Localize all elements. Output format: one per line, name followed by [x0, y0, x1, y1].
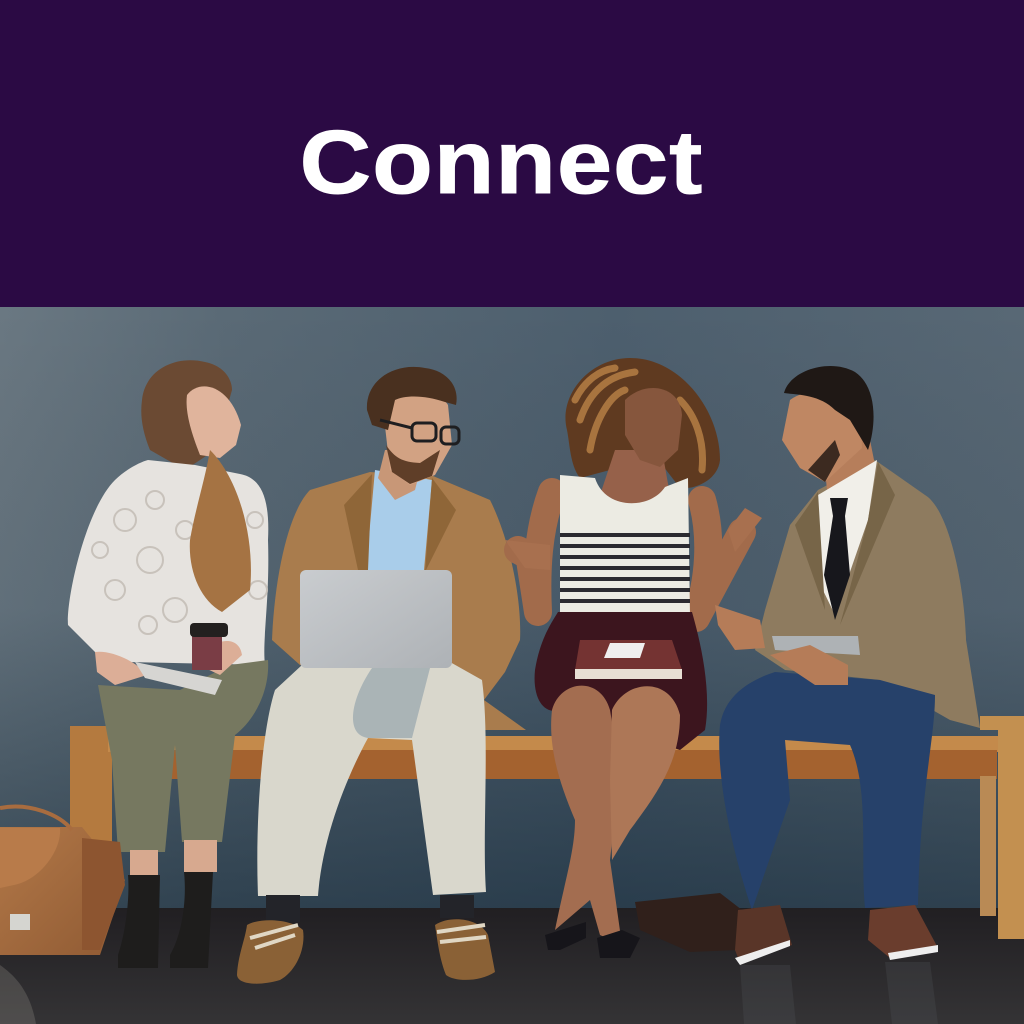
hands — [505, 508, 762, 570]
floor bag — [635, 893, 742, 952]
hair — [367, 367, 457, 430]
hands — [95, 641, 242, 685]
notebook — [575, 640, 682, 679]
skirt — [535, 612, 707, 750]
laptop — [300, 570, 452, 668]
bench — [70, 716, 1024, 939]
floor — [0, 908, 1024, 1024]
jacket — [755, 460, 980, 728]
head — [782, 391, 862, 482]
trousers — [257, 662, 486, 896]
coffee cup — [190, 623, 228, 670]
lace blouse — [68, 460, 268, 665]
neck — [822, 430, 875, 500]
shoes — [735, 905, 792, 963]
shoes — [545, 922, 640, 958]
striped top — [560, 475, 690, 616]
arms — [518, 492, 742, 618]
jeans — [719, 672, 935, 910]
shoes — [237, 920, 303, 984]
neck — [378, 450, 425, 500]
head — [382, 391, 452, 485]
legs — [551, 686, 622, 945]
phone — [604, 643, 645, 658]
hands — [715, 605, 848, 685]
face — [187, 386, 241, 458]
shirt — [366, 470, 432, 570]
tablet — [772, 636, 860, 655]
person 3: woman in striped top — [505, 358, 762, 958]
hair back — [141, 360, 232, 470]
lace pattern — [92, 491, 267, 634]
beard — [386, 445, 440, 484]
heading banner — [0, 0, 1024, 307]
illustration: four people talking on a bench — [0, 307, 1024, 1024]
paper — [135, 662, 222, 695]
trousers — [98, 660, 268, 852]
title: Connect — [300, 113, 703, 213]
handbag — [0, 807, 125, 955]
person 1: woman in lace top — [68, 360, 268, 968]
person 2: man with laptop — [237, 367, 526, 984]
wall — [0, 307, 1024, 910]
long hair — [190, 450, 251, 612]
tie — [824, 498, 850, 620]
socks — [266, 895, 474, 922]
beard — [808, 440, 840, 482]
shirt — [818, 460, 877, 615]
jacket — [272, 472, 526, 730]
laces — [250, 925, 486, 948]
person 4: man with tablet — [715, 366, 980, 965]
legs and boots — [130, 840, 217, 878]
hair — [565, 358, 720, 488]
hair curls — [575, 368, 703, 470]
neck and chest — [600, 450, 670, 515]
lapels — [344, 474, 456, 572]
lapels — [795, 462, 895, 625]
hair — [784, 366, 874, 450]
glasses — [380, 420, 459, 444]
soles — [735, 940, 938, 965]
face — [625, 388, 682, 467]
